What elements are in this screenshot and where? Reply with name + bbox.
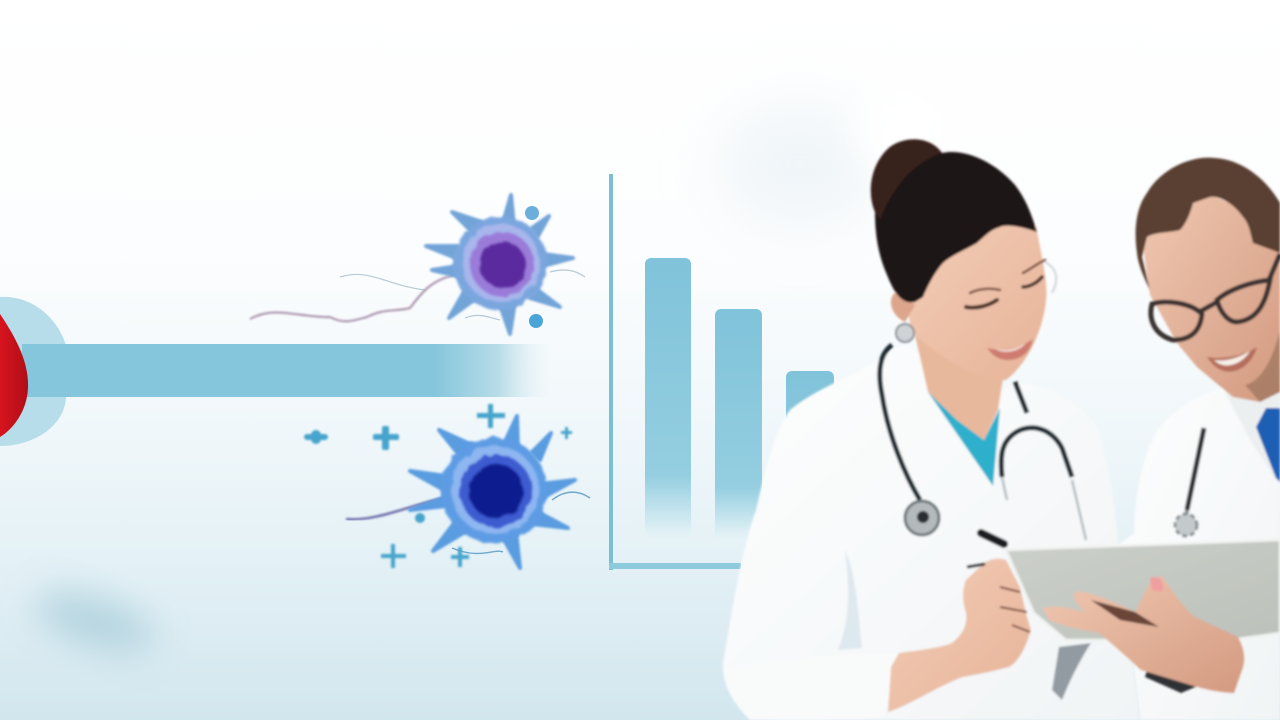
lab coat [723, 345, 1140, 720]
stethoscope [880, 345, 1072, 500]
doctor: woman [723, 139, 1140, 720]
tube with blood drop [0, 297, 552, 446]
icon: holding hand [1145, 660, 1200, 693]
icon: blood drop [0, 314, 28, 437]
cell: blue [346, 416, 590, 568]
hair [871, 139, 1037, 302]
neck [915, 335, 1003, 440]
stethoscope [1187, 428, 1204, 510]
cell: purple [250, 195, 585, 334]
tablet [1006, 540, 1280, 693]
smile [987, 339, 1033, 360]
glasses [1151, 254, 1280, 340]
arm and hand [888, 559, 1031, 712]
eyes [966, 260, 1045, 308]
shirt [928, 392, 1000, 486]
plus particles [304, 404, 572, 568]
doctor: man [1118, 158, 1280, 720]
bar chart [609, 174, 834, 570]
face [908, 221, 1046, 380]
